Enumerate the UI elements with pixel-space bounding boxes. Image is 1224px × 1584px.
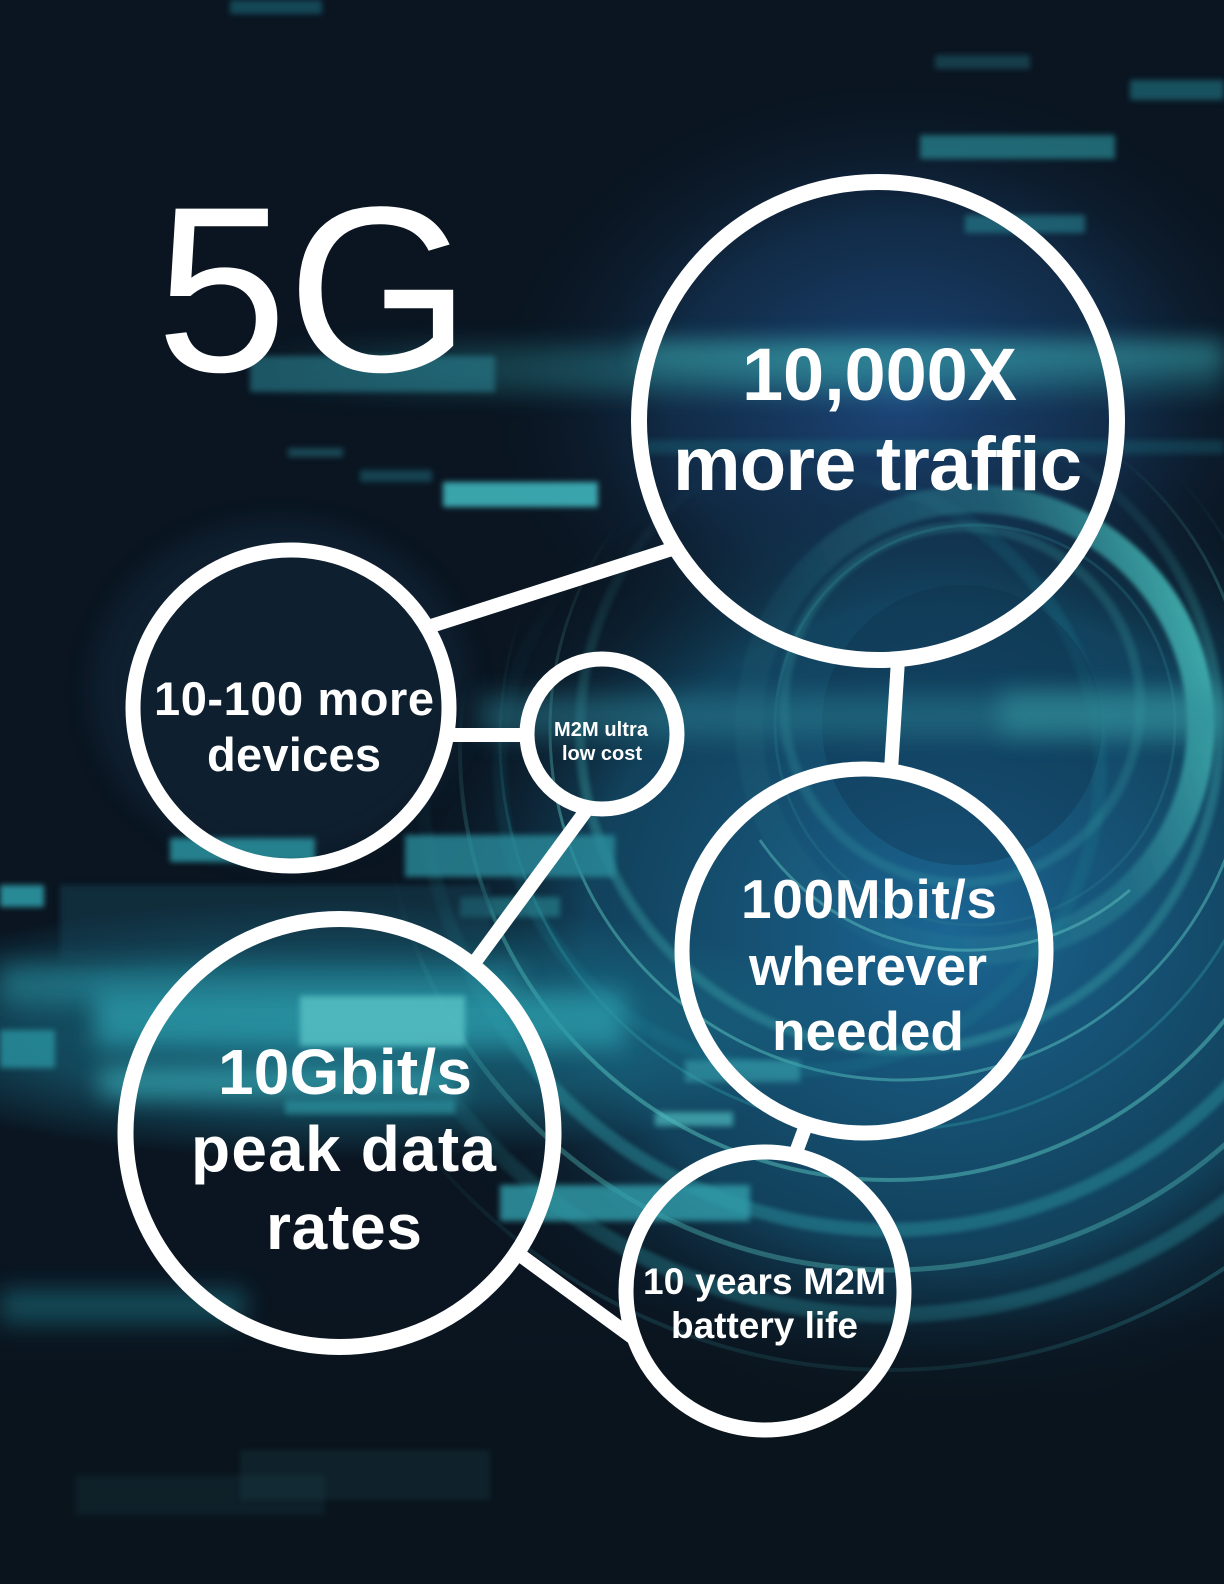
circle: 10Gbit/s peak data rates: 10Gbit/s <box>218 1036 472 1108</box>
circle: M2M ultra low cost: low cost <box>562 743 642 765</box>
connector: traffic to devices <box>428 549 672 627</box>
background rings <box>420 470 1224 1372</box>
circle: 10,000X more traffic: 10,000X <box>742 333 1017 416</box>
circle: 100Mbit/s wherever needed <box>682 769 1046 1133</box>
circle: 10-100 more devices <box>133 550 449 866</box>
circle: 10,000X more traffic: more traffic <box>673 422 1082 507</box>
circle: 10,000X more traffic <box>639 182 1117 660</box>
faint lower streaks <box>75 1450 490 1515</box>
circle: 10 years M2M battery life: battery life <box>671 1305 858 1346</box>
connector: traffic to 100Mbit/s <box>891 660 898 770</box>
connector: 100Mbit/s to battery life <box>795 1128 805 1155</box>
connector: devices to M2M cost <box>448 728 525 742</box>
circle: 10 years M2M battery life: 10 years M2M <box>643 1261 886 1302</box>
title: 5G: 5G <box>156 158 471 422</box>
circle: 100Mbit/s wherever needed: 100Mbit/s <box>741 868 997 930</box>
circle: 10-100 more devices: 10-100 more <box>154 672 434 725</box>
circle: 10Gbit/s peak data rates: peak data <box>191 1113 496 1185</box>
connector: M2M cost to 10Gbit/s <box>472 808 588 966</box>
circle: 100Mbit/s wherever needed: needed <box>772 1000 964 1062</box>
connector: 10Gbit/s to battery life <box>520 1255 632 1337</box>
circle: 10Gbit/s peak data rates <box>126 919 554 1347</box>
circle: 100Mbit/s wherever needed: wherever <box>748 935 987 997</box>
circle: M2M ultra low cost <box>527 659 677 809</box>
circle: M2M ultra low cost: M2M ultra <box>554 719 649 741</box>
circle: 10 years M2M battery life <box>626 1152 904 1430</box>
circle: 10Gbit/s peak data rates: rates <box>266 1191 422 1263</box>
circle: 10-100 more devices: devices <box>207 728 381 781</box>
